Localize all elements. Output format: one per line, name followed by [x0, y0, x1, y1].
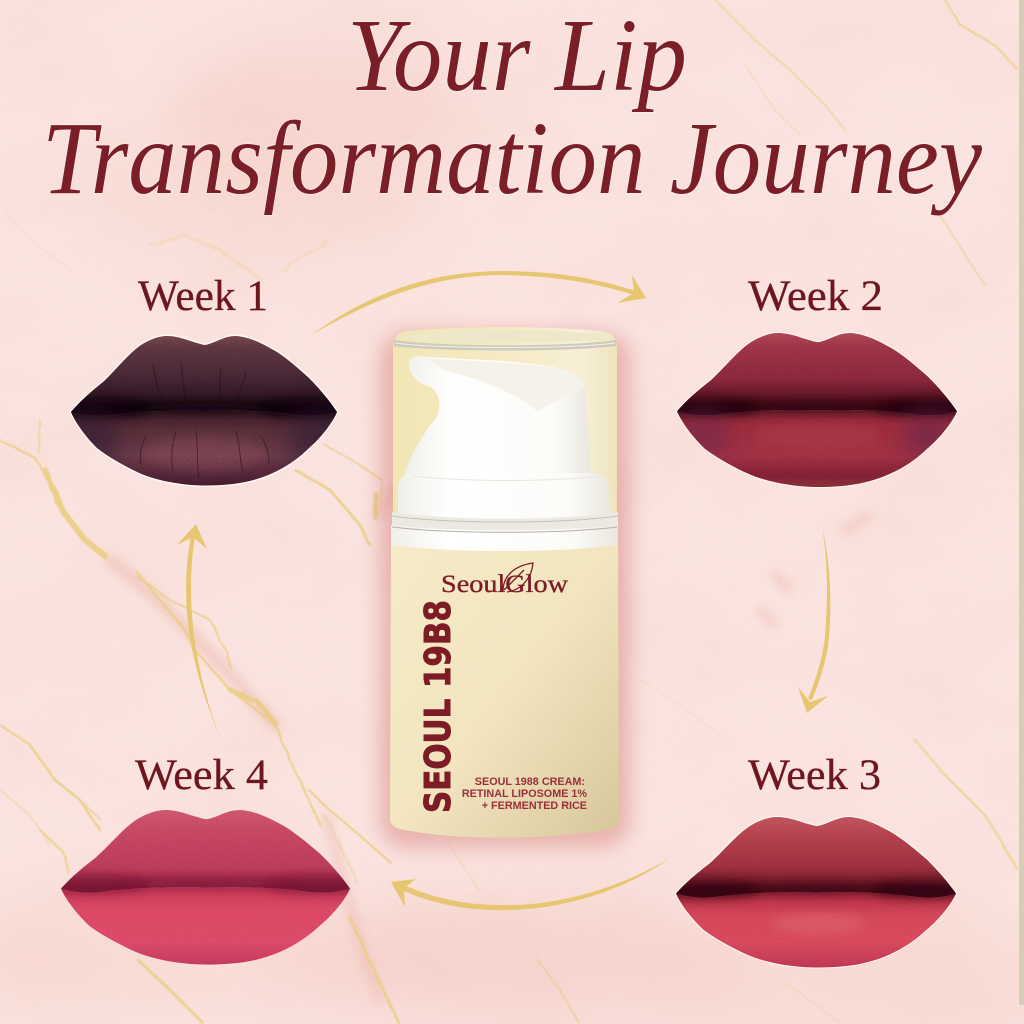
week 2 label: Week 2 [748, 273, 883, 320]
lips week 4 [61, 810, 350, 965]
white pump [398, 356, 611, 520]
arrow: week 4 to week 1 [177, 524, 222, 742]
lips week 2 [676, 332, 958, 488]
arrow: week 1 to week 2 [311, 271, 646, 335]
product description: + FERMENTED RICE [482, 800, 587, 812]
cream body [390, 545, 619, 838]
title line 1: Your Lip [347, 0, 687, 113]
arrow: week 2 to week 3 [798, 527, 830, 713]
arrow: week 3 to week 4 [391, 858, 670, 910]
product description [462, 776, 587, 812]
week 1 label: Week 1 [138, 273, 268, 320]
clear cap [393, 327, 617, 525]
product description: SEOUL 1988 CREAM: [475, 776, 585, 788]
week 3 label: Week 3 [748, 752, 881, 799]
white collar [391, 525, 618, 551]
lips week 1 [70, 334, 338, 487]
cap rim [392, 512, 618, 531]
week 4 label: Week 4 [135, 752, 268, 799]
product description: RETINAL LIPOSOME 1% [462, 788, 587, 800]
vertical product name: SEOUL 19B8 [418, 600, 459, 813]
bottle shadow [380, 333, 630, 847]
icon: leaf [503, 563, 533, 592]
title [42, 0, 983, 216]
brand name: SeoulGlow [441, 571, 568, 598]
lips week 3 [675, 816, 957, 968]
title line 2: Transformation Journey [42, 101, 983, 216]
product bottle [380, 327, 630, 847]
